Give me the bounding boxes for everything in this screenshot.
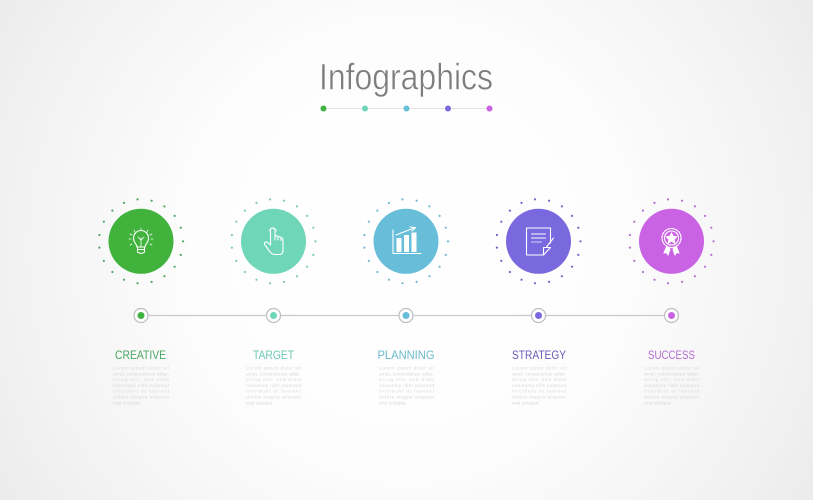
text block: target: scing elit, sed diam xyxy=(246,377,301,383)
timeline node: planning xyxy=(399,308,413,322)
dotted ring: creative xyxy=(98,198,184,284)
icon: award rosette xyxy=(662,228,681,255)
text block: creative: scing elit, sed diam xyxy=(113,377,169,383)
text block: success: nonummy nibh euismod xyxy=(644,383,699,389)
heading: planning: PLANNING xyxy=(378,348,434,362)
icon: bar chart xyxy=(393,227,421,254)
text block: strategy: tincidunt ut laoreet xyxy=(512,389,567,395)
text block: planning: erat volutpat. xyxy=(379,400,407,406)
circle: strategy xyxy=(506,209,571,274)
circle: creative xyxy=(108,209,174,274)
panel: success xyxy=(629,198,715,406)
text block: success: dolore magna aliquam xyxy=(644,394,699,400)
text block: strategy: nonummy nibh euismod xyxy=(512,383,566,389)
title: Infographics xyxy=(319,56,493,98)
text block: planning: scing elit, sed diam xyxy=(379,377,434,383)
text block: success: erat volutpat. xyxy=(644,400,672,406)
text block: creative: nonummy nibh euismod xyxy=(113,383,169,389)
heading: target: TARGET xyxy=(253,348,295,362)
dotted ring: strategy xyxy=(496,198,582,284)
dotted ring: planning xyxy=(363,198,449,284)
circle: planning xyxy=(374,209,438,274)
panel: strategy xyxy=(496,198,582,406)
panel: creative xyxy=(98,198,184,406)
heading: strategy: STRATEGY xyxy=(512,348,566,362)
text block: success xyxy=(644,366,700,406)
dotted ring: success xyxy=(629,198,715,284)
circle: success xyxy=(639,209,704,274)
text block: creative: Lorem ipsum dolor sit xyxy=(113,366,170,372)
text block: target: Lorem ipsum dolor sit xyxy=(246,366,302,372)
text block: success: Lorem ipsum dolor sit xyxy=(644,366,700,372)
text block: target: tincidunt ut laoreet xyxy=(246,389,302,395)
text block: creative: erat volutpat. xyxy=(113,400,141,406)
timeline node: strategy xyxy=(532,308,546,322)
text block: creative: dolore magna aliquam xyxy=(113,394,169,400)
title dot divider xyxy=(320,106,492,112)
circle: target xyxy=(241,209,306,274)
text block: success: amet, consectetuer adipi- xyxy=(644,371,699,377)
text block: target: amet, consectetuer adipi- xyxy=(246,371,301,377)
timeline node: target xyxy=(266,308,280,322)
heading: creative: CREATIVE xyxy=(115,348,166,362)
text block: strategy: amet, consectetuer adipi- xyxy=(512,371,566,377)
icon: document and pen xyxy=(526,228,554,255)
text block: strategy: dolore magna aliquam xyxy=(512,394,566,400)
text block: target: dolore magna aliquam xyxy=(246,394,301,400)
text block: success: tincidunt ut laoreet xyxy=(644,389,700,395)
text block: planning: tincidunt ut laoreet xyxy=(379,389,435,395)
text block: planning: nonummy nibh euismod xyxy=(379,383,434,389)
text block: planning: dolore magna aliquam xyxy=(379,394,434,400)
text block: planning: amet, consectetuer adipi- xyxy=(379,371,434,377)
text block: creative: amet, consectetuer adipi- xyxy=(113,371,169,377)
text block: creative xyxy=(113,366,170,406)
timeline node: success xyxy=(664,308,678,322)
text block: planning xyxy=(379,366,435,406)
text block: target: erat volutpat. xyxy=(246,400,274,406)
text block: strategy: erat volutpat. xyxy=(512,400,540,406)
icon: pointing hand xyxy=(264,228,283,254)
text block: target: nonummy nibh euismod xyxy=(246,383,301,389)
panel: planning xyxy=(363,198,449,406)
text block: planning: Lorem ipsum dolor sit xyxy=(379,366,435,372)
timeline node: creative xyxy=(134,308,148,322)
text block: strategy: Lorem ipsum dolor sit xyxy=(512,366,567,372)
text block: strategy: scing elit, sed diam xyxy=(512,377,566,383)
text block: success: scing elit, sed diam xyxy=(644,377,699,383)
dotted ring: target xyxy=(231,198,317,284)
text block: target xyxy=(246,366,302,406)
icon: light bulb xyxy=(129,228,153,254)
text block: strategy xyxy=(512,366,567,406)
timeline line xyxy=(141,314,671,316)
panel: target xyxy=(231,198,317,406)
text block: creative: tincidunt ut laoreet xyxy=(113,389,170,395)
heading: success: SUCCESS xyxy=(648,348,695,362)
